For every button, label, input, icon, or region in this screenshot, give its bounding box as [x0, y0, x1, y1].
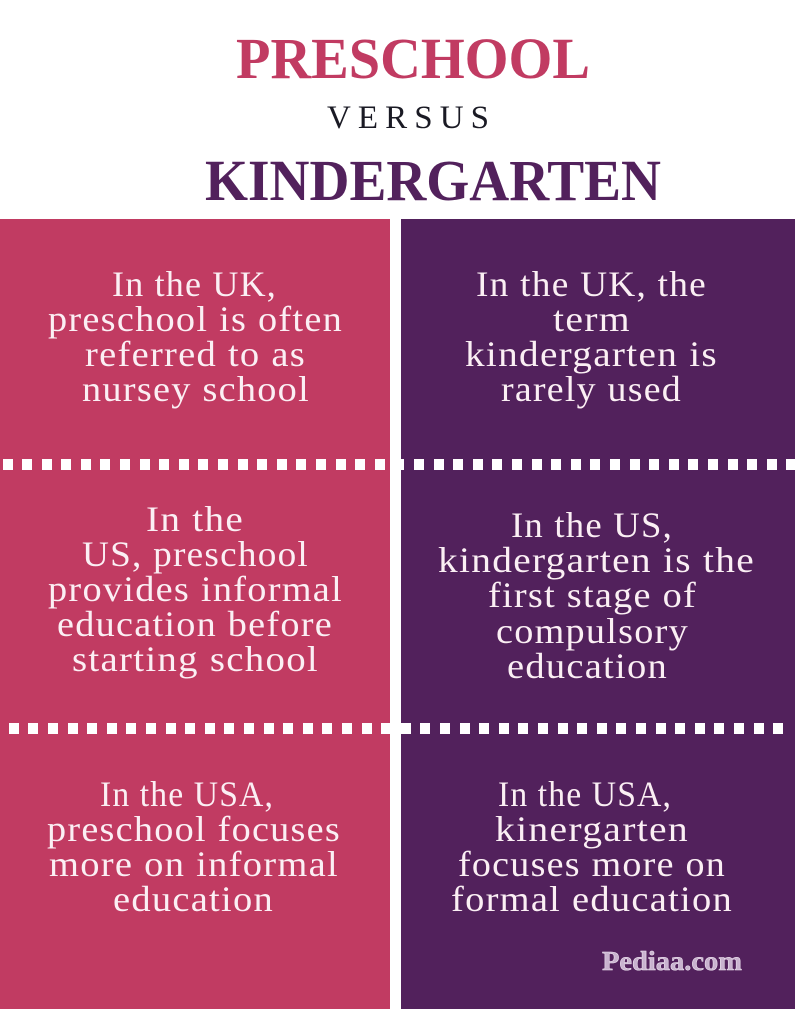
text: kindergarten row 3 [451, 774, 733, 919]
text: kindergarten row 2: education [507, 646, 668, 686]
text: kindergarten row 3: focuses more on [458, 844, 726, 884]
text: preschool row 2: education before [57, 604, 333, 644]
text: kindergarten row 1: term [553, 299, 631, 339]
text: kindergarten row 2: first stage of [488, 575, 697, 615]
text: preschool row 1: In the UK, [112, 264, 277, 304]
text: kindergarten row 2 [438, 505, 755, 686]
text: preschool row 1: nursey school [82, 369, 310, 409]
title: preschool: PRESCHOOL [236, 26, 590, 91]
logo: Pediaa.com: Pediaa.com [602, 946, 743, 976]
text: preschool row 1 [48, 264, 343, 409]
text: preschool row 2: In the [146, 499, 244, 539]
text: preschool row 1: referred to as [85, 334, 306, 374]
text: kindergarten row 1: In the UK, the [476, 264, 707, 304]
text: kindergarten row 3: kinergarten [495, 809, 689, 849]
text: kindergarten row 2: kindergarten is the [438, 540, 755, 580]
text: kindergarten row 3: formal education [451, 879, 733, 919]
text: preschool row 3: In the USA, [100, 774, 274, 814]
text: kindergarten row 2: compulsory [496, 611, 689, 651]
text: kindergarten row 3: In the USA, [498, 774, 672, 814]
text: preschool row 3: preschool focuses [47, 809, 341, 849]
text: preschool row 1: preschool is often [48, 299, 343, 339]
text: preschool row 2 [48, 499, 343, 679]
text: preschool row 3: more on informal [49, 844, 339, 884]
dotted divider: upper row [3, 459, 795, 470]
dotted divider: lower row [9, 723, 783, 734]
panel: kindergarten column background [401, 219, 795, 1009]
text: kindergarten row 1: kindergarten is [465, 334, 718, 374]
text: kindergarten row 1 [465, 264, 718, 409]
text: preschool row 2: starting school [72, 639, 319, 679]
text: preschool row 2: provides informal [48, 569, 343, 609]
text: kindergarten row 2: In the US, [511, 505, 673, 545]
panel: preschool column background [0, 219, 390, 1009]
text: preschool row 3: education [113, 879, 274, 919]
text: preschool row 2: US, preschool [82, 534, 309, 574]
title: kindergarten: KINDERGARTEN [205, 148, 661, 213]
text: kindergarten row 1: rarely used [501, 369, 682, 409]
title: versus: VERSUS [327, 100, 489, 136]
text: preschool row 3 [47, 774, 341, 919]
